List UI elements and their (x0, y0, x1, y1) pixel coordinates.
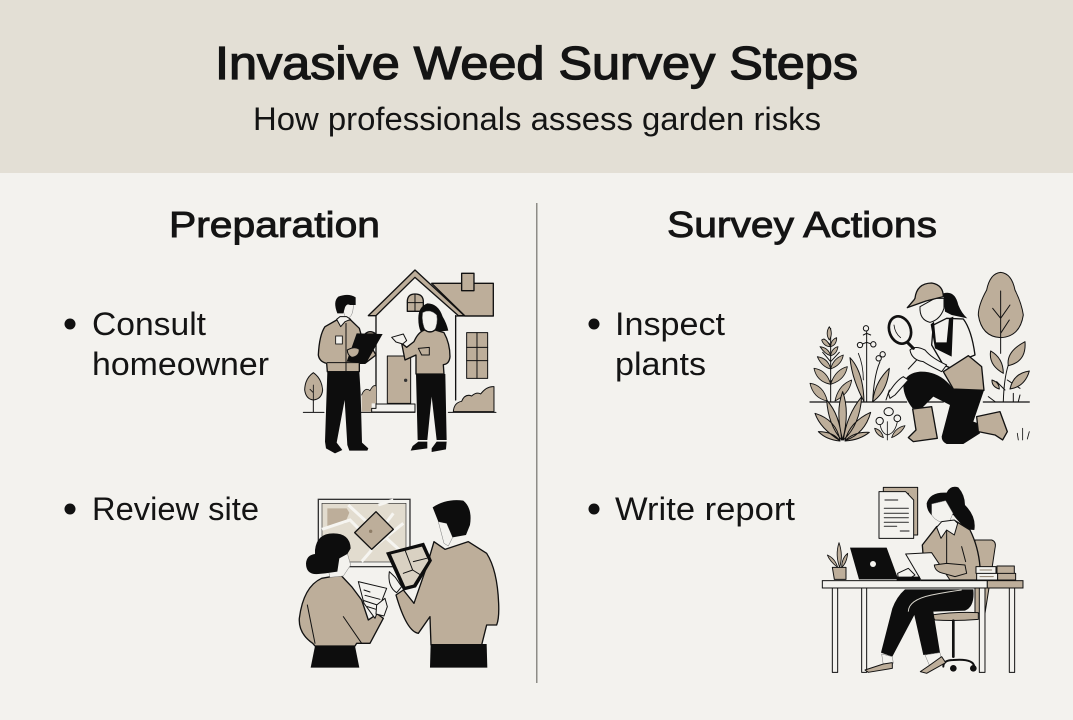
title: Invasive Weed Survey Steps (215, 37, 858, 89)
subtitle: How professionals assess garden risks (253, 101, 821, 137)
bullet: inspect plants (588, 306, 725, 382)
bullet: inspect plants: plants (615, 346, 706, 382)
bullet: write report: Write report (615, 491, 795, 527)
icon: writing report at desk (822, 487, 1023, 673)
bullet: consult homeowner: Consult (92, 306, 206, 342)
panel: preparation (64, 204, 499, 668)
bullet: consult homeowner: homeowner (92, 346, 269, 382)
heading: survey actions: Survey Actions (667, 204, 937, 245)
icon: surveyor and homeowner at house (303, 270, 496, 453)
icon: reviewing site map and tablet (299, 499, 499, 668)
bullet: review site: Review site (92, 491, 259, 527)
header band (0, 0, 1073, 173)
panel: survey actions (588, 204, 1029, 673)
bullet: inspect plants: Inspect (615, 306, 725, 342)
icon: surveyor inspecting plants with magnifier (810, 272, 1029, 444)
bullet: consult homeowner (64, 306, 269, 382)
heading: preparation: Preparation (169, 204, 380, 245)
